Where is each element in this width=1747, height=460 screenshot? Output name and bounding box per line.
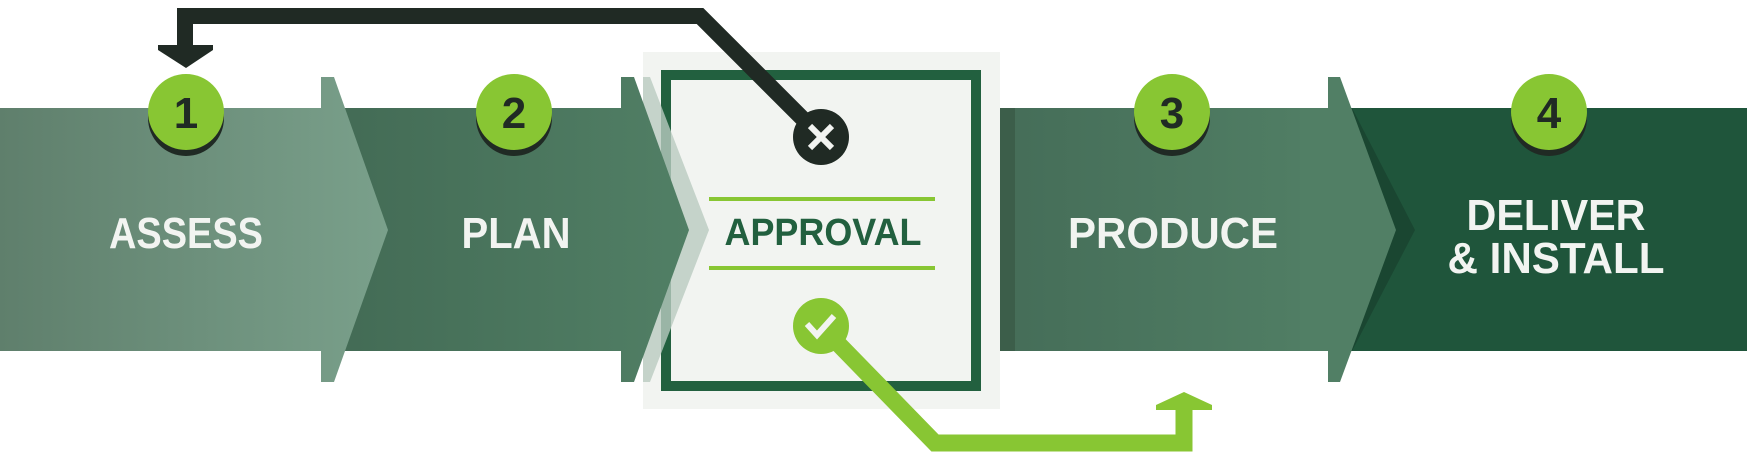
step 4 badge <box>1511 74 1587 156</box>
label: assess: ASSESS <box>109 209 263 258</box>
label: deliver & install: DELIVER <box>1466 191 1646 240</box>
label: deliver & install: & INSTALL <box>1448 234 1664 283</box>
label: deliver & install <box>1448 191 1664 283</box>
panel: produce band <box>1000 77 1396 382</box>
panel: plan band <box>334 108 624 351</box>
step 2 badge: 2 <box>502 89 526 138</box>
panel: approval <box>643 52 1000 409</box>
step 4 badge: 4 <box>1537 89 1562 138</box>
panel: deliver band <box>1340 108 1747 351</box>
icon: approve check <box>793 298 849 354</box>
plan shadow <box>643 77 709 382</box>
step 1 badge <box>148 74 224 156</box>
approval label: APPROVAL <box>724 212 922 254</box>
arrow: approve path <box>821 326 1212 443</box>
arrow: reject loop <box>158 16 821 137</box>
step 1 badge: 1 <box>174 89 198 138</box>
divider lines <box>709 197 935 270</box>
step 3 badge <box>1134 74 1210 156</box>
step 2 badge <box>476 74 552 156</box>
label: produce: PRODUCE <box>1068 209 1278 258</box>
arrow: assess <box>0 77 388 382</box>
arrow: plan <box>334 77 689 382</box>
label: plan: PLAN <box>462 209 570 258</box>
icon: reject x <box>793 109 849 165</box>
step 3 badge: 3 <box>1160 89 1184 138</box>
